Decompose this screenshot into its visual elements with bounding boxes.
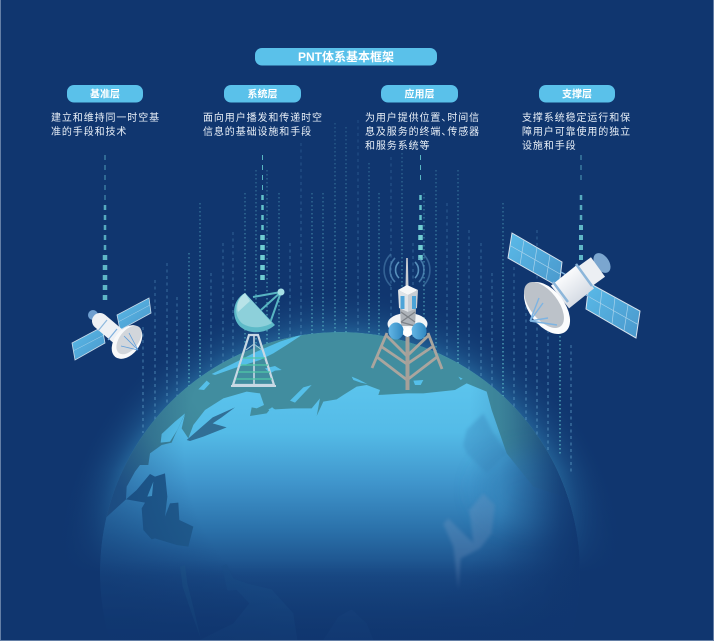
icon: small satellite — [72, 298, 151, 365]
globe — [100, 332, 578, 620]
main signal beam: dish — [262, 155, 264, 282]
column: 支撑层: 支撑系统稳定运行和保 — [522, 111, 631, 124]
column: 系统层: 系统层 — [248, 88, 278, 100]
column: 支撑层: 支撑层 — [562, 88, 592, 100]
column: 支撑层: 障用户可靠使用的独立 — [522, 125, 631, 138]
icon: dish antenna — [231, 288, 284, 386]
column: 基准层: 准的手段和技术 — [51, 125, 127, 138]
column: 应用层: 应用层 — [404, 88, 434, 100]
column: 应用层: 和服务系统等 — [365, 139, 430, 152]
column: 应用层: 息及服务的终端、传感器 — [365, 125, 480, 138]
column: 应用层: 为用户提供位置、时间信 — [365, 111, 480, 124]
main signal beam: satellite left — [104, 155, 106, 302]
icon: large satellite — [508, 233, 640, 342]
column: 支撑层 — [522, 85, 631, 152]
glow around globe — [55, 287, 625, 641]
column: 系统层: 面向用户播发和传递时空 — [203, 111, 323, 124]
icon: signal tower — [372, 254, 442, 390]
blend of cap into sea at right — [500, 452, 572, 518]
title pill: PNT体系基本框架 — [298, 49, 394, 64]
polar dark cap — [106, 332, 565, 517]
column: 系统层: 信息的基础设施和手段 — [203, 125, 312, 138]
column: 基准层: 建立和维持同一时空基 — [51, 111, 160, 124]
title pill — [255, 48, 437, 66]
main signal beam: tower — [420, 155, 422, 263]
signal data lines — [143, 120, 571, 473]
column: 基准层 — [51, 85, 160, 138]
column: 系统层 — [203, 85, 323, 138]
bright arctic islands — [161, 334, 463, 443]
signal waves — [384, 254, 430, 286]
main signal beam: satellite right — [580, 155, 582, 262]
dark seas and continents — [126, 408, 504, 602]
column: 基准层: 基准层 — [90, 88, 120, 100]
column: 应用层 — [365, 85, 480, 152]
column: 支撑层: 设施和手段 — [522, 139, 576, 152]
